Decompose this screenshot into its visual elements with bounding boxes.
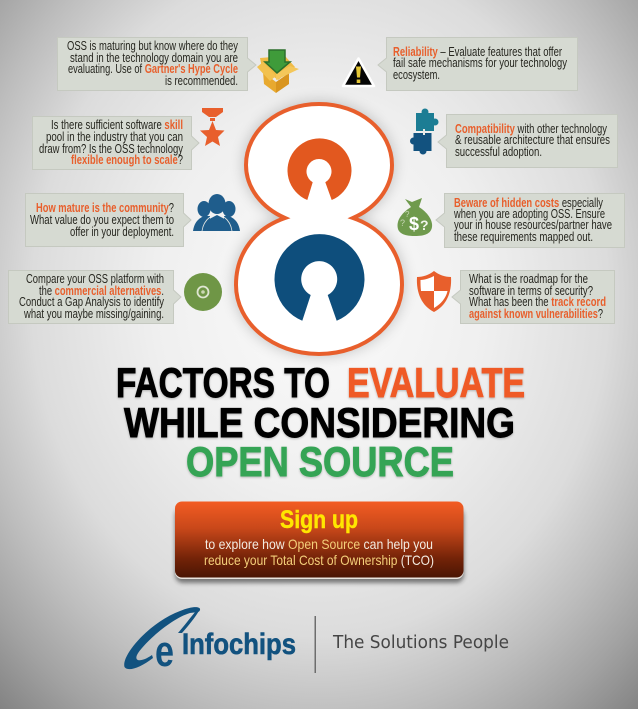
- panel: security callout: software in terms of security?: [469, 284, 593, 298]
- tagline: The Solutions People: [332, 632, 509, 653]
- icon: people group: [193, 194, 240, 231]
- panel: hype cycle callout: evaluating. Use of Gartner's Hype Cycle: [68, 62, 238, 76]
- panel: security callout: [452, 270, 614, 324]
- sign up button: [175, 502, 464, 583]
- keyhole: blue: [274, 234, 365, 321]
- panel: community callout: [26, 194, 191, 246]
- panel: compatibility callout: [438, 114, 618, 168]
- panel: compatibility callout: Compatibility with other technology: [455, 122, 608, 136]
- panel: hype cycle callout: OSS is maturing but know where do they: [67, 39, 239, 53]
- logo: eInfochips: [124, 607, 296, 676]
- icon: puzzle pieces: [410, 108, 438, 154]
- panel: commercial alternatives callout: the commercial alternatives.: [39, 284, 164, 298]
- panel: community callout: offer in your deployment.: [70, 225, 174, 239]
- large figure 8 with open source keyholes: [236, 104, 402, 354]
- sign up button: reduce your Total Cost of Ownership (TCO): [204, 552, 434, 568]
- panel: hidden costs callout: Beware of hidden costs especially: [454, 196, 604, 210]
- title: [116, 359, 525, 485]
- divider: [314, 616, 316, 673]
- icon: open box with arrow: [257, 50, 299, 93]
- panel: hype cycle callout: is recommended.: [165, 74, 238, 88]
- title: WHILE CONSIDERING: [124, 399, 515, 446]
- icon: shield: [417, 271, 451, 312]
- keyhole: orange: [288, 138, 352, 200]
- panel: hidden costs callout: [436, 194, 624, 248]
- panel: commercial alternatives callout: Compare your OSS platform with: [26, 272, 164, 286]
- panel: skill pool callout: draw from? Is the OSS technology: [39, 142, 184, 156]
- panel: reliability callout: Reliability – Evaluate features that offer: [393, 45, 562, 59]
- panel: reliability callout: fail safe mechanisms for your technology: [393, 56, 568, 70]
- panel: reliability callout: [378, 38, 578, 90]
- sign up button: to explore how Open Source can help you: [205, 536, 433, 552]
- icon: money bag: ?: [420, 217, 429, 233]
- title: FACTORS TO: [116, 359, 330, 406]
- icon: compact disc: [184, 273, 222, 311]
- panel: skill pool callout: pool in the industry that you can: [46, 130, 183, 144]
- panel: security callout: What is the roadmap for the: [469, 272, 588, 286]
- panel: hype cycle callout: [58, 38, 256, 90]
- icon: money bag: [398, 198, 432, 236]
- panel: compatibility callout: successful adoption.: [455, 145, 542, 159]
- title: OPEN SOURCE: [186, 438, 454, 485]
- panel: skill pool callout: [32, 116, 199, 170]
- icon: money bag: $: [409, 214, 419, 234]
- panel: security callout: What has been the track record: [469, 295, 606, 309]
- sign up button: Sign up: [280, 506, 358, 534]
- logo: eInfochips: e: [155, 627, 174, 676]
- panel: skill pool callout: Is there sufficient software skill: [51, 118, 183, 132]
- panel: commercial alternatives callout: Conduct a Gap Analysis to identify: [19, 295, 165, 309]
- icon: money bag: ?: [405, 210, 410, 219]
- panel: hype cycle callout: stand in the technology domain you are: [70, 51, 238, 65]
- logo: eInfochips: Infochips: [182, 628, 296, 661]
- title: EVALUATE: [347, 359, 525, 406]
- panel: reliability callout: ecosystem.: [393, 68, 440, 82]
- panel: commercial alternatives callout: what you maybe missing/gaining.: [23, 307, 164, 321]
- icon: money bag: ?: [400, 218, 405, 228]
- panel: commercial alternatives callout: [8, 270, 181, 324]
- panel: hidden costs callout: these requirements mapped out.: [454, 230, 593, 244]
- panel: community callout: What value do you expect them to: [30, 213, 174, 227]
- icon: star medal: [200, 108, 224, 146]
- panel: community callout: How mature is the community?: [36, 201, 174, 215]
- panel: skill pool callout: flexible enough to scale?: [71, 153, 183, 167]
- icon: warning triangle: [343, 58, 374, 86]
